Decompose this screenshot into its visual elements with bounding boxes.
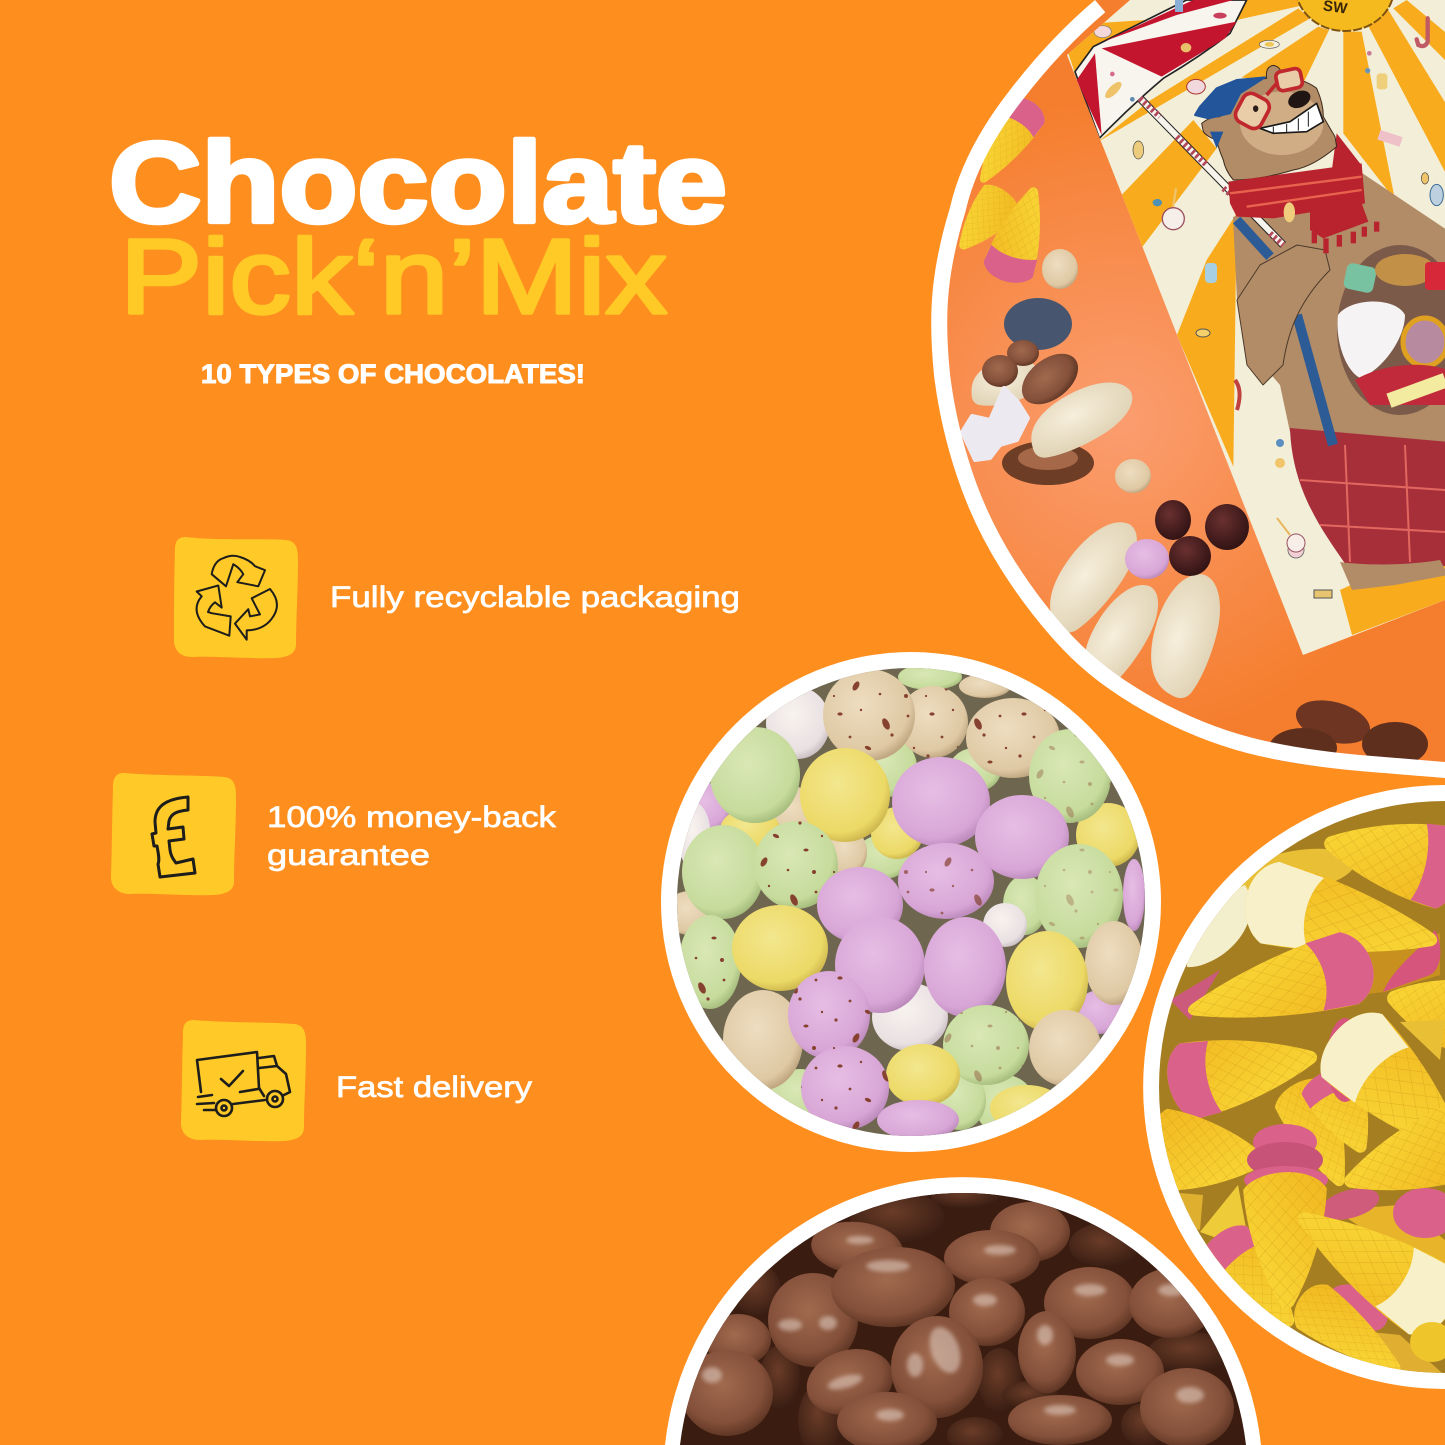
- icon: recycle arrows: [197, 556, 277, 640]
- label: recyclable: Fully recyclable packaging: [330, 581, 740, 614]
- badge: recycling: [174, 537, 298, 658]
- pink cap: [1244, 1124, 1328, 1186]
- back chocolates: [733, 1184, 1232, 1445]
- loose ice-cream cones: [959, 98, 1045, 283]
- bear grin: [1260, 103, 1323, 133]
- doodles: [1094, 26, 1111, 38]
- white ring: [931, 0, 1445, 778]
- label: money-back: 100% money-back: [267, 801, 557, 834]
- bear foot: [1340, 560, 1445, 590]
- photo circle: ice-cream cone sweets: [1143, 785, 1445, 1391]
- icon: delivery truck: [197, 1052, 290, 1116]
- window with sweets: [1337, 245, 1445, 415]
- photo circle: speckled mini eggs: [661, 652, 1161, 1152]
- bear scarf back tail: [1332, 134, 1365, 204]
- title: Chocolate: Chocolate: [109, 120, 727, 247]
- photo circle: gift box with bear: [925, 0, 1445, 780]
- suspender: [1297, 315, 1333, 445]
- bear nose: [1288, 90, 1310, 108]
- suspender upper: [1237, 220, 1270, 257]
- bear muzzle: [1240, 92, 1323, 155]
- feature: recyclable packaging: [174, 537, 740, 658]
- badge: truck: [181, 1020, 306, 1141]
- umbrella: [1075, 0, 1247, 138]
- feature: fast delivery: [181, 1020, 532, 1141]
- umbrella pole: [1140, 98, 1283, 245]
- icon: pound sign: [152, 797, 195, 877]
- back slabs: [1180, 1193, 1203, 1230]
- title: Pick'n'Mix: Pick‘n’Mix: [120, 218, 667, 336]
- sun rays: [1065, 0, 1445, 467]
- front chocolates: [681, 1202, 1234, 1445]
- sun seal: [1296, 0, 1394, 31]
- bear hat: [1195, 77, 1265, 118]
- badge: pound: [111, 773, 236, 895]
- bear glasses: [1232, 68, 1303, 132]
- photo circle: milk chocolate raisins: [665, 1177, 1261, 1445]
- label: guarantee: guarantee: [267, 839, 430, 872]
- chocolate highlights: [702, 1236, 1204, 1421]
- feature: money-back guarantee: [111, 773, 557, 895]
- bear shorts: [1290, 428, 1445, 566]
- bear arm: [1237, 245, 1330, 385]
- subtitle: 10 TYPES OF CHOCOLATES!: [201, 359, 585, 389]
- more doodles: [1196, 263, 1332, 598]
- umbrella, bear head and doodles: [1075, 0, 1443, 257]
- bear torso: [1233, 173, 1445, 445]
- bear head: [1202, 65, 1337, 180]
- loose sweets: [962, 249, 1428, 768]
- bear scarf: [1228, 163, 1365, 218]
- gift box: [1060, 0, 1445, 660]
- label: fast delivery: Fast delivery: [336, 1071, 532, 1104]
